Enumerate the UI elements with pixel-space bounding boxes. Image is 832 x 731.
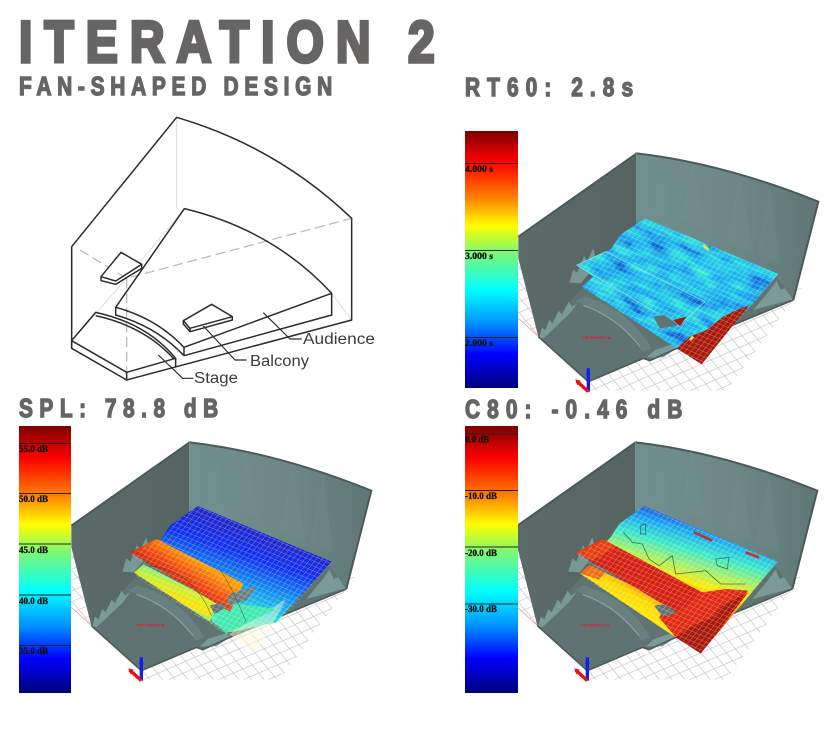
panel: RT60 room simulation <box>518 152 820 393</box>
colorbar: RT60: 4.000 s <box>465 165 493 175</box>
colorbar: C80: 0.0 dB <box>465 436 490 446</box>
colorbar: RT60 <box>465 131 518 388</box>
colorbar: SPL: 50.0 dB <box>19 495 49 505</box>
C80 mesh <box>606 506 778 653</box>
heading: SPL: SPL: 78.8 dB <box>19 394 218 422</box>
colorbar: RT60: 2.000 s <box>465 339 493 349</box>
label: balcony: Balcony <box>250 353 309 370</box>
colorbar: SPL: 35.0 dB <box>19 647 49 657</box>
colorbar: C80 <box>465 426 518 693</box>
colorbar: SPL <box>19 426 71 693</box>
colorbar: C80: -20.0 dB <box>465 549 498 559</box>
colorbar: SPL: 55.0 dB <box>19 445 49 455</box>
balcony centre <box>183 304 232 332</box>
balcony strip <box>576 539 702 613</box>
colorbar: SPL: 40.0 dB <box>19 597 49 607</box>
audience <box>116 209 332 356</box>
panel: C80 room simulation <box>517 442 817 681</box>
heading: RT60: RT60: 2.8s <box>465 73 633 101</box>
panel: RT60 room simulation: •Orchestra <box>582 335 611 341</box>
balcony side <box>101 252 142 284</box>
colorbar: RT60: 3.000 s <box>465 252 493 262</box>
panel: SPL room simulation: •Orchestra <box>136 622 165 628</box>
stage <box>72 312 176 380</box>
outer shell <box>72 117 352 380</box>
colorbar: SPL: 45.0 dB <box>19 546 49 556</box>
colorbar: C80: -10.0 dB <box>465 492 498 502</box>
panel: SPL room simulation <box>71 442 371 681</box>
colorbar: C80: -30.0 dB <box>465 605 498 615</box>
title: ITERATION 2 <box>19 10 435 75</box>
leaders <box>158 313 302 378</box>
SPL mesh <box>160 506 332 632</box>
lower section <box>580 565 692 637</box>
panel: fan-shaped line drawing <box>72 117 352 380</box>
label: audience: Audience <box>303 331 375 348</box>
heading: fan-shaped design: FAN-SHAPED DESIGN <box>19 72 332 100</box>
panel: C80 room simulation: •Orchestra <box>581 622 610 628</box>
RT60 mesh <box>577 218 778 348</box>
heading: C80: C80: -0.46 dB <box>465 395 682 423</box>
label: stage: Stage <box>194 370 238 387</box>
